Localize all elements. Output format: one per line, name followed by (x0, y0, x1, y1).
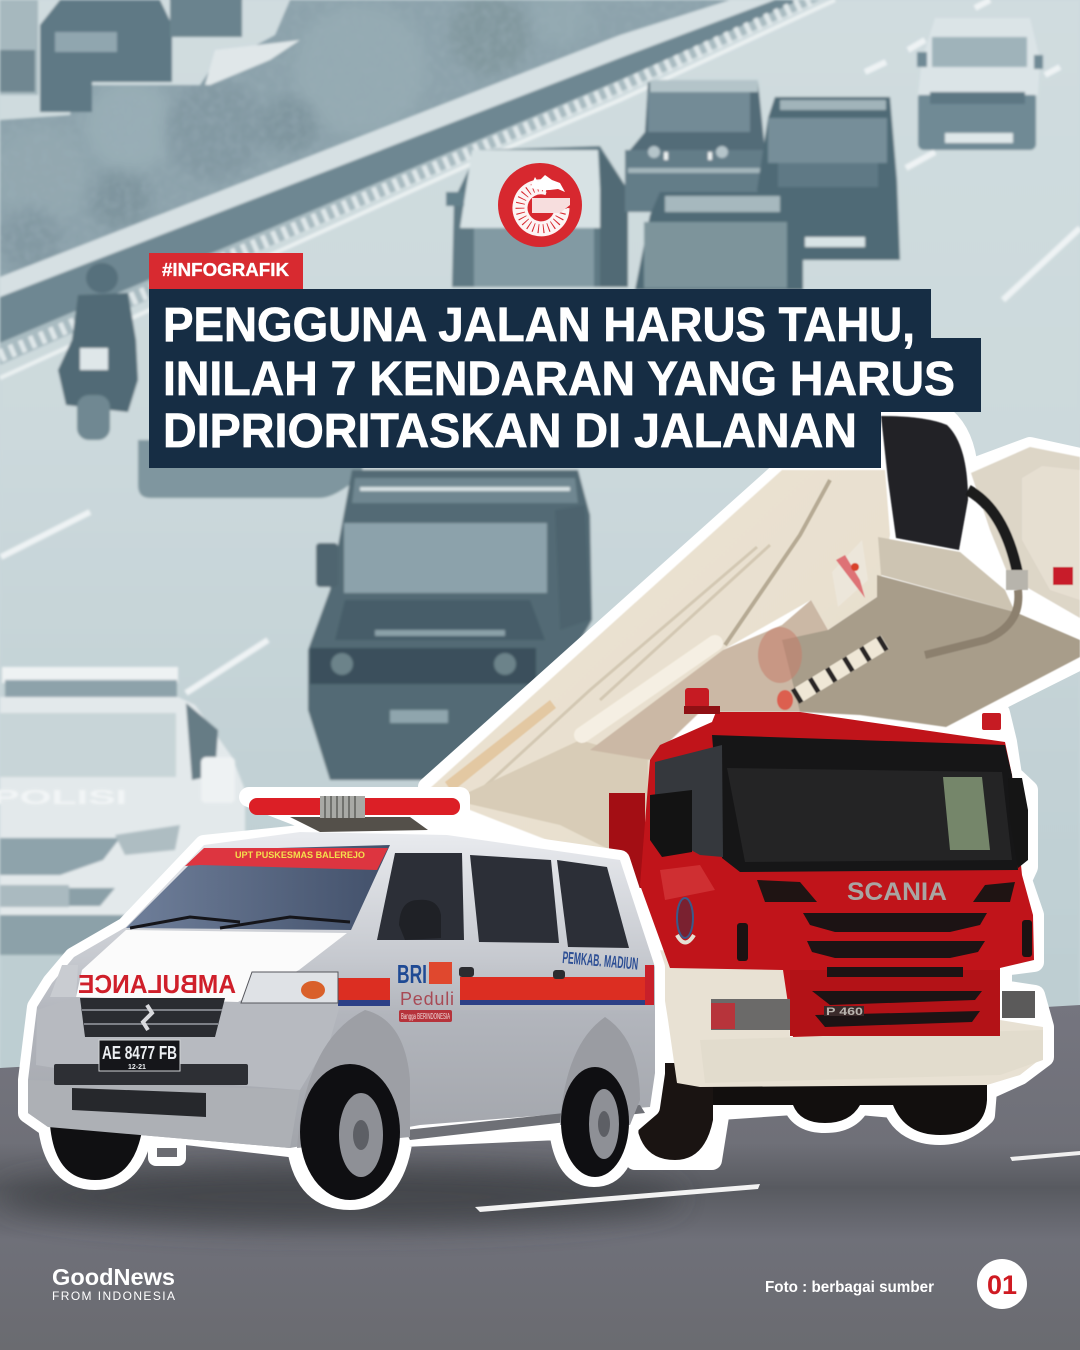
under platform (782, 575, 1080, 727)
cab white lower body (657, 950, 1043, 1087)
scania wordmark: SCANIA (847, 878, 947, 906)
platform box (878, 537, 1015, 612)
roadside bushes (0, 0, 760, 290)
number plate: AE 8477 FB (102, 1043, 177, 1063)
number plate (99, 1040, 180, 1071)
rear wheel (561, 1067, 629, 1177)
vehicle: pale jeep top right (917, 18, 1043, 150)
door emblem (677, 898, 694, 942)
platform side panel (971, 447, 1080, 618)
boom cylinder (582, 643, 715, 735)
far cars (0, 0, 300, 112)
page number (977, 1259, 1027, 1309)
ambulance (28, 796, 655, 1200)
headlamp eyes (757, 880, 1015, 902)
wheel arches (297, 1010, 410, 1148)
hood (76, 930, 347, 1002)
windscreen (712, 735, 1018, 872)
fire truck (428, 415, 1080, 1160)
page number: 01 (987, 1270, 1017, 1300)
grille slats (803, 913, 987, 1027)
right mirror (1008, 778, 1028, 868)
front bumper (28, 1080, 300, 1148)
door handles (459, 967, 565, 979)
vehicle: alphard (446, 146, 628, 287)
ambulance white outline (28, 797, 655, 1200)
windscreen banner (185, 848, 388, 870)
roof light bar (249, 796, 460, 832)
warning chevron (832, 540, 868, 607)
wipers (130, 917, 350, 928)
boom decal stripe (445, 700, 556, 792)
lower grille block (790, 970, 1000, 1036)
hose (968, 490, 1018, 575)
road surface (0, 1005, 1080, 1350)
truck headlights (711, 991, 1035, 1030)
ambulance body (28, 832, 655, 1148)
boom ribs (470, 545, 770, 800)
vehicle: police car (0, 667, 245, 955)
vehicle: car behind title (138, 440, 364, 498)
mirrored ambulance lettering: AMBULANCE (78, 969, 236, 999)
brand logotype: FROM INDONESIA (52, 1289, 175, 1303)
logo eagle head (530, 175, 565, 192)
photo credit: Foto : berbagai sumber (765, 1279, 934, 1296)
glass reflections (727, 768, 1012, 862)
brand logotype (52, 1264, 175, 1303)
title line 3: DIPRIORITASKAN DI JALANAN (163, 405, 857, 458)
front lower panel (36, 997, 340, 1090)
side stripe (338, 965, 654, 1006)
truck white outline (428, 415, 1080, 1160)
side window (655, 745, 723, 857)
bri peduli decal: Bangga BERINDONESIA (401, 1012, 450, 1021)
brand logotype: GoodNews (52, 1264, 175, 1290)
lower boom shade (452, 740, 648, 850)
side sill (405, 1105, 645, 1140)
vehicle: central jeep (308, 470, 592, 780)
headlight orange lamp (301, 981, 325, 999)
boom struts (725, 480, 830, 645)
front wheel (300, 1064, 400, 1200)
bri peduli decal: BRI (397, 959, 427, 989)
headlight (241, 972, 338, 1003)
pemkab lettering: PEMKAB. MADIUN (562, 948, 639, 974)
red compartment (609, 793, 645, 888)
tyres and undercarriage (636, 1063, 987, 1160)
logo g bar (532, 198, 570, 213)
guardrail (0, 0, 835, 378)
logo ring ornament (520, 187, 562, 229)
bri peduli decal (397, 959, 454, 1022)
wing mirror (399, 900, 441, 940)
title block (149, 253, 981, 468)
lower grille strip (54, 1064, 248, 1085)
red reflection highlight (660, 865, 715, 900)
title line 1: PENGGUNA JALAN HARUS TAHU, (163, 299, 915, 352)
p460 badge: P 460 (826, 1006, 863, 1018)
logo g ring (520, 187, 562, 229)
lane markings (1, 0, 1080, 693)
vehicle: jeep one (625, 80, 765, 212)
windscreen banner: UPT PUSKESMAS BALEREJO (235, 850, 365, 860)
door vent (737, 923, 748, 961)
hashtag tag: #INFOGRAFIK (162, 260, 289, 280)
tow tab (148, 1136, 186, 1166)
side windows (377, 853, 629, 948)
number plate: 12-21 (128, 1064, 146, 1071)
ladder boom (428, 416, 1080, 880)
vehicle: motorbike rider (58, 263, 138, 440)
bellows (795, 642, 885, 697)
cab red body (640, 712, 1034, 1037)
title panel (149, 289, 981, 468)
bumper highlight (700, 1030, 1043, 1083)
front grille (80, 998, 225, 1037)
mudguard (881, 416, 968, 550)
title line 2: INILAH 7 KENDARAN YANG HARUS (163, 353, 955, 406)
bri peduli decal: Peduli (400, 989, 454, 1009)
cab beacons (684, 688, 1001, 730)
front left tyre (50, 1125, 143, 1180)
hashtag tag (149, 253, 303, 289)
bumper intake (72, 1088, 206, 1117)
left headlight (50, 965, 78, 997)
left mirror (650, 790, 692, 857)
windscreen (126, 845, 390, 930)
logo badge (498, 163, 582, 247)
right side vent (1022, 920, 1032, 957)
rear wheel arch (560, 1017, 640, 1125)
vehicle: jeep two (757, 97, 900, 260)
vehicle: jeep three (635, 192, 803, 290)
